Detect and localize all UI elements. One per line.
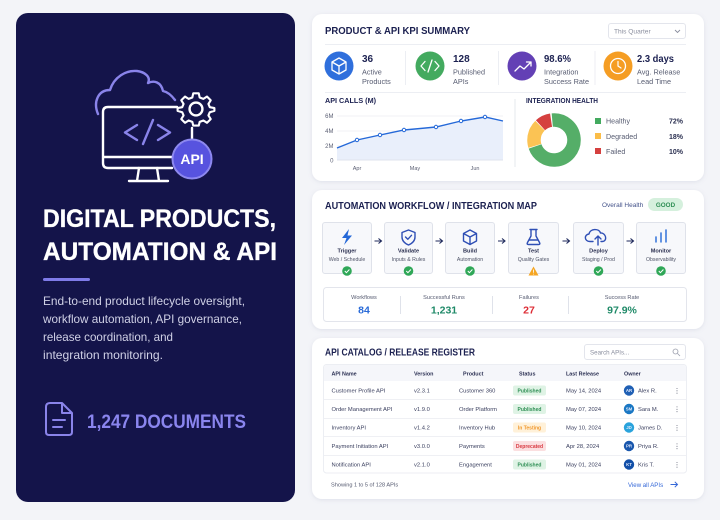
donut chart: integration health: 10%: [669, 149, 684, 156]
row: order management: Order Management API: [332, 407, 393, 413]
KPI: active products: Products: [362, 77, 391, 86]
description: workflow automation, API governance,: [42, 312, 242, 326]
workflow stats: 84: [358, 304, 370, 316]
row: inventory: v1.4.2: [414, 426, 430, 432]
step: deploy: Staging / Prod: [582, 257, 615, 263]
row: order management: v1.9.0: [414, 407, 430, 413]
row: payment initiation: Payments: [459, 444, 485, 450]
row: customer profile: Alex R.: [638, 388, 657, 394]
heading: catalog: API CATALOG / RELEASE REGISTER: [325, 348, 476, 358]
line chart: API calls: Jun: [471, 166, 479, 172]
workflow stats: 1,231: [431, 304, 457, 316]
step: monitor: Monitor: [651, 248, 672, 254]
step: validate: Validate: [398, 248, 419, 254]
step: trigger: Trigger: [338, 248, 357, 254]
row: notification: Kris T.: [638, 462, 654, 468]
row: notification: Engagement: [459, 462, 492, 468]
row: order management: [332, 404, 677, 414]
step: monitor: [636, 222, 686, 276]
step: test: Test: [528, 248, 539, 254]
line chart: API calls: Apr: [353, 166, 361, 172]
row: order management: SM: [626, 406, 633, 412]
KPI: active products: [324, 52, 391, 86]
step: trigger: [322, 222, 372, 276]
table footer: View all APIs: [628, 482, 663, 489]
line chart: API calls: 0: [330, 158, 334, 164]
step: monitor: Observability: [646, 257, 676, 263]
table footer: [331, 482, 678, 489]
table header: API Name: [332, 372, 357, 378]
description: End-to-end product lifecycle oversight,: [43, 294, 245, 308]
KPI: release lead time: [604, 52, 680, 86]
row: order management: Order Platform: [459, 407, 497, 413]
row: notification: Notification API: [332, 462, 371, 468]
table: [324, 364, 686, 473]
KPI: published APIs: 128: [453, 54, 470, 65]
row: customer profile: AR: [626, 388, 633, 393]
step: test: Quality Gates: [518, 257, 550, 263]
KPI: release lead time: Lead Time: [637, 77, 671, 86]
document count: 1,247 DOCUMENTS: [87, 412, 246, 433]
row: customer profile: [332, 385, 677, 396]
KPI: published APIs: APIs: [453, 77, 469, 86]
row: customer profile: May 14, 2024: [566, 388, 602, 394]
KPI: release lead time: Avg. Release: [637, 68, 680, 76]
icon: cloud, monitor, gear and API: [96, 71, 214, 181]
row: payment initiation: [332, 441, 677, 451]
arrow: [498, 238, 505, 244]
table header: Owner: [624, 372, 642, 378]
step: validate: Inputs & Rules: [392, 257, 426, 263]
dropdown: This Quarter: [614, 28, 651, 36]
row: order management: May 07, 2024: [566, 407, 602, 413]
overall health: GOOD: [656, 202, 676, 209]
row: notification: [332, 459, 677, 470]
step: test: [508, 222, 558, 276]
search box: [584, 344, 686, 360]
row: payment initiation: Payment Initiation API: [332, 444, 389, 450]
row: customer profile: Customer 360: [459, 388, 495, 394]
row: notification: KT: [626, 462, 632, 467]
panel: automation workflow: [312, 190, 704, 329]
table header: Status: [519, 372, 535, 378]
table footer: Showing 1 to 5 of 128 APIs: [331, 482, 398, 488]
panel: hero: API: [180, 151, 204, 167]
row: order management: Sara M.: [638, 407, 659, 413]
step: build: Build: [463, 248, 478, 254]
icon: document: [46, 403, 72, 435]
donut chart: integration health: Failed: [606, 148, 625, 156]
step: trigger: Web / Schedule: [329, 257, 365, 263]
step: validate: [384, 222, 432, 276]
search box: Search APIs...: [590, 350, 629, 356]
heading: workflow: AUTOMATION WORKFLOW / INTEGRATION MAP: [325, 200, 537, 212]
row: notification: May 01, 2024: [566, 462, 602, 468]
workflow stats: Successful Runs: [423, 295, 465, 301]
donut chart: integration health: 72%: [669, 118, 684, 126]
panel: KPI summary: [312, 14, 704, 181]
panel: API catalog: [312, 338, 704, 499]
table header: Version: [414, 372, 433, 378]
row: inventory: Inventory Hub: [459, 426, 495, 432]
dropdown: [608, 24, 686, 38]
workflow stats: Workflows: [351, 295, 377, 301]
step: build: [446, 222, 494, 276]
donut chart: integration health: INTEGRATION HEALTH: [526, 98, 598, 105]
title: DIGITAL PRODUCTS,: [43, 205, 276, 233]
KPI: integration success: Success Rate: [544, 77, 589, 86]
row: inventory: JD: [626, 425, 632, 430]
line chart: API calls: 4M: [325, 129, 334, 135]
row: payment initiation: v3.0.0: [414, 444, 430, 450]
description: release coordination, and: [43, 330, 173, 344]
overall health: Overall Health: [602, 202, 644, 209]
row: inventory: James D.: [638, 426, 663, 432]
arrow: [374, 238, 382, 244]
line chart: API calls: 2M: [325, 144, 334, 150]
row: inventory: Inventory API: [332, 426, 366, 432]
description: integration monitoring.: [43, 348, 163, 362]
table header: Product: [463, 372, 484, 378]
row: customer profile: v2.3.1: [414, 388, 430, 394]
row: inventory: [332, 422, 677, 433]
workflow stats: Success Rate: [605, 295, 639, 301]
workflow stats: 27: [523, 304, 535, 316]
table header: Last Release: [566, 372, 599, 378]
row: payment initiation: Deprecated: [516, 444, 543, 450]
KPI: published APIs: [416, 52, 485, 86]
heading: KPI: PRODUCT & API KPI SUMMARY: [325, 25, 470, 37]
line chart: API calls: API CALLS (M): [325, 98, 376, 105]
row: customer profile: Customer Profile API: [332, 388, 386, 394]
donut chart: integration health: Healthy: [606, 118, 631, 126]
overall health: [602, 198, 683, 211]
row: notification: Published: [518, 462, 541, 468]
row: inventory: May 10, 2024: [566, 426, 602, 432]
line chart: API calls: May: [410, 166, 420, 172]
row: payment initiation: Apr 28, 2024: [566, 444, 600, 450]
step: deploy: Deploy: [589, 248, 609, 254]
donut chart: integration health: [526, 98, 684, 162]
workflow stats: 97.9%: [607, 304, 638, 316]
KPI: integration success: 98.6%: [544, 54, 571, 65]
arrow: [562, 238, 570, 244]
step: deploy: [574, 222, 624, 276]
table header: [332, 372, 642, 378]
KPI: integration success: [508, 52, 589, 86]
donut chart: integration health: Degraded: [606, 133, 637, 141]
KPI: integration success: Integration: [544, 68, 578, 76]
KPI: published APIs: Published: [453, 68, 485, 76]
line chart: API calls: [325, 98, 503, 172]
title: AUTOMATION & API: [43, 238, 277, 266]
row: inventory: In Testing: [518, 426, 541, 432]
KPI: active products: 36: [362, 54, 374, 65]
panel: hero: [16, 13, 295, 502]
KPI: active products: Active: [362, 68, 382, 76]
row: customer profile: Published: [518, 388, 541, 394]
workflow stats: Failures: [519, 295, 539, 301]
workflow stats: [324, 288, 686, 322]
row: payment initiation: Priya R.: [638, 444, 659, 450]
arrow: [626, 238, 634, 244]
row: notification: v2.1.0: [414, 462, 430, 468]
donut chart: integration health: 18%: [669, 134, 684, 141]
step: build: Automation: [457, 257, 483, 263]
line chart: API calls: 6M: [325, 114, 334, 120]
row: payment initiation: PR: [626, 444, 633, 448]
row: order management: Published: [518, 407, 541, 413]
arrow: [436, 238, 442, 244]
KPI: release lead time: 2.3 days: [637, 54, 674, 65]
